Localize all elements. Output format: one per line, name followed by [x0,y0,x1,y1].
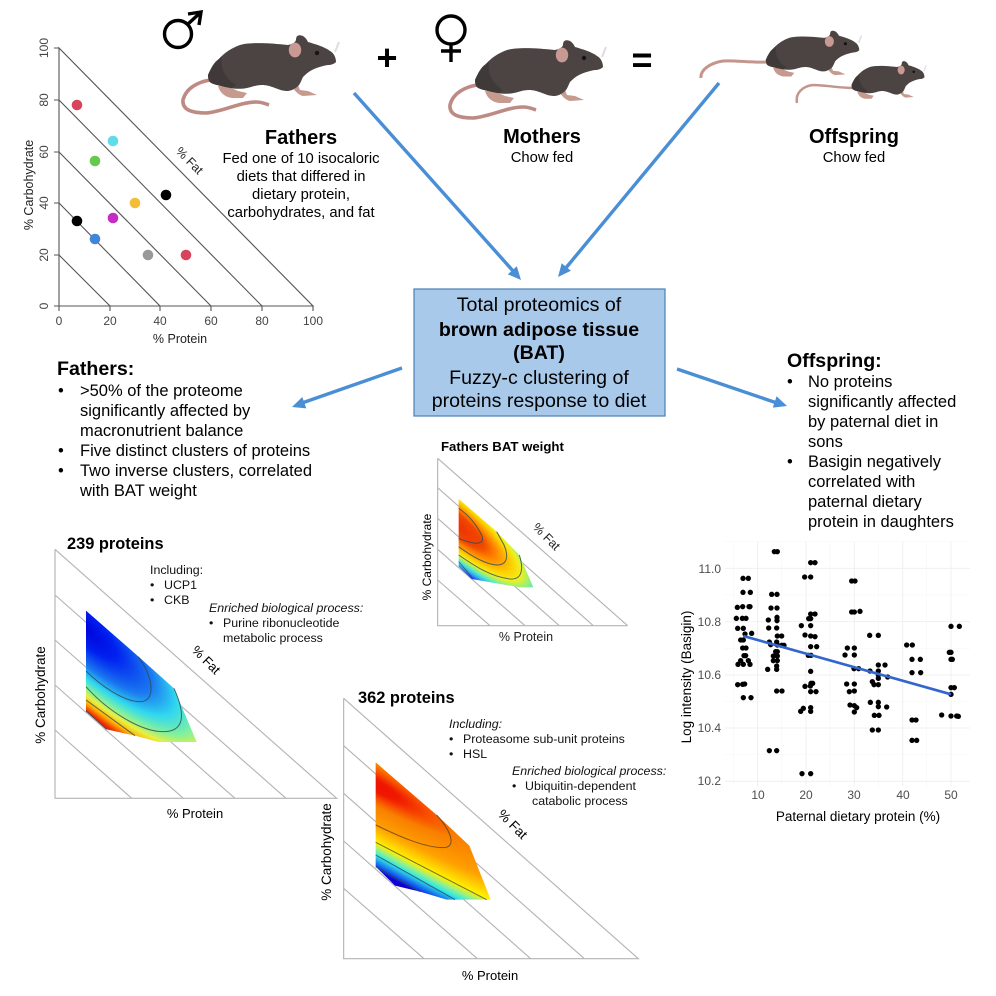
central box: total proteomics: brown adipose tissue [439,319,639,341]
text: fathers: diets that differed in [237,169,365,185]
text: fathers findings: • [58,442,64,460]
arrow: box to offspring [677,369,787,408]
central box: total proteomics: proteins response to diet [432,390,647,412]
text: fathers: dietary protein, [252,187,350,203]
heatmap: fathers BAT weight: % Protein [499,630,553,644]
icon: mother mouse [450,40,606,118]
arrow: box to fathers [292,368,402,408]
heatmap: 239 proteins: % Protein [167,806,223,821]
heatmap: 362 proteins: catabolic process [532,794,628,808]
heatmap: fathers BAT weight [420,439,628,644]
ternary diet plot: 100 [37,38,51,58]
text: offspring findings: sons [808,433,843,451]
text: mothers: Mothers [503,126,581,148]
ternary diet plot: 40 [37,196,51,210]
text: fathers findings: Fathers: [57,358,134,380]
text: offspring findings: protein in daughters [808,513,954,531]
ternary diet plot [22,38,323,346]
heatmap: 239 proteins: Enriched biological process: [209,601,363,615]
scatter plot: basigin vs paternal protein: Log intensity (Basigin) [679,611,694,743]
heatmap: 362 proteins: Proteasome sub-unit proteins [463,732,625,746]
text: offspring findings: Offspring: [787,350,882,372]
text: fathers: carbohydrates, and fat [227,205,375,221]
arrow: fathers to box [354,93,521,280]
heatmap: 239 proteins: metabolic process [223,631,323,645]
arrow: offspring to box [558,83,719,277]
ternary diet plot: 60 [204,314,218,328]
scatter plot: basigin vs paternal protein: 10.4 [698,721,721,735]
text: fathers findings: Two inverse clusters, correlated [80,462,312,480]
heatmap: 239 proteins [33,535,363,821]
heatmap: 362 proteins: • [449,747,453,761]
text: offspring findings: significantly affected [808,393,956,411]
ternary diet plot: 40 [153,314,167,328]
scatter plot: basigin vs paternal protein: 11.0 [699,562,721,576]
text: fathers: Fed one of 10 isocaloric [222,151,380,167]
central box: total proteomics: Fuzzy-c clustering of [449,367,629,389]
text: fathers findings: >50% of the proteome [80,382,243,400]
text: mothers: Chow fed [511,150,573,166]
text: fathers findings: significantly affected by [80,402,251,420]
scatter plot: basigin vs paternal protein: 30 [847,788,861,802]
scatter plot: basigin vs paternal protein: 40 [896,788,910,802]
text: fathers findings: Five distinct clusters of proteins [80,442,310,460]
scatter plot: basigin vs paternal protein: 50 [944,788,958,802]
heatmap: 362 proteins: 362 proteins [358,689,455,707]
scatter plot: basigin vs paternal protein: Paternal dietary protein (%) [776,809,940,824]
heatmap: 239 proteins: • [150,593,154,607]
text: fathers findings [57,358,312,500]
text: offspring findings: Basigin negatively [808,453,942,471]
ternary diet plot: % Carbohydrate [22,140,36,230]
ternary diet plot: % Fat [173,144,206,178]
equals sign: = [631,39,653,80]
ternary diet plot: 60 [37,145,51,159]
heatmap: 362 proteins: Enriched biological process: [512,764,666,778]
ternary diet plot: 20 [103,314,117,328]
text: offspring: Offspring [809,126,899,148]
text: fathers findings: with BAT weight [79,482,197,500]
heatmap: 239 proteins: % Carbohydrate [33,646,48,744]
scatter plot: basigin vs paternal protein: 10.6 [698,668,721,682]
text: fathers: Fathers [265,127,337,149]
heatmap: 239 proteins: 239 proteins [67,535,164,553]
scatter plot: basigin vs paternal protein: 20 [799,788,813,802]
heatmap: 362 proteins: HSL [463,747,487,761]
central box: total proteomics: Total proteomics of [457,294,622,316]
ternary diet plot: 100 [303,314,323,328]
text: mothers [503,126,581,166]
text: offspring: Chow fed [823,150,885,166]
heatmap: 362 proteins: Ubiquitin-dependent [525,779,636,793]
ternary diet plot: 80 [255,314,269,328]
text: fathers findings: macronutrient balance [80,422,243,440]
text: offspring findings: correlated with [808,473,915,491]
heatmap: fathers BAT weight: Fathers BAT weight [441,439,564,454]
heatmap: 362 proteins: % Fat [495,807,531,842]
scatter plot: basigin vs paternal protein: 10.2 [698,774,721,788]
heatmap: 239 proteins: UCP1 [164,578,197,592]
text: offspring findings [787,350,956,531]
heatmap: fathers BAT weight: % Carbohydrate [420,513,434,600]
heatmap: 362 proteins: • [449,732,453,746]
icon: offspring mice [701,31,926,103]
heatmap: 239 proteins: % Fat [189,643,224,677]
heatmap: 362 proteins: % Protein [462,968,518,983]
text: offspring findings: • [787,453,793,471]
heatmap: 239 proteins: Including: [150,563,203,577]
text: offspring [809,126,899,166]
text: fathers findings: • [58,462,64,480]
heatmap: 362 proteins: % Carbohydrate [319,803,334,901]
ternary diet plot: 0 [37,302,51,309]
heatmap: 239 proteins: CKB [164,593,189,607]
text: offspring findings: by paternal diet in [808,413,938,431]
text: offspring findings: No proteins [808,373,892,391]
ternary diet plot: 20 [37,248,51,262]
heatmap: 362 proteins: Including: [449,717,502,731]
text: fathers [222,127,380,221]
heatmap: 239 proteins: • [209,616,213,630]
scatter plot: basigin vs paternal protein: 10.8 [698,615,721,629]
text: offspring findings: paternal dietary [808,493,922,511]
scatter plot: basigin vs paternal protein: 10 [751,788,765,802]
heatmap: 239 proteins: Purine ribonucleotide [223,616,340,630]
icon: male symbol [164,12,201,48]
heatmap: 239 proteins: • [150,578,154,592]
ternary diet plot: % Protein [153,332,207,346]
heatmap: 362 proteins: • [512,779,516,793]
icon: father mouse [183,35,339,113]
plus sign: + [376,37,398,78]
central box: total proteomics: (BAT) [513,342,565,364]
heatmap: 362 proteins [319,689,666,983]
ternary diet plot: 0 [56,314,63,328]
central box: total proteomics [414,289,665,416]
icon: female symbol [437,16,465,62]
ternary diet plot: 80 [37,93,51,107]
text: fathers findings: • [58,382,64,400]
text: offspring findings: • [787,373,793,391]
scatter plot: basigin vs paternal protein [679,542,970,824]
heatmap: fathers BAT weight: % Fat [530,520,563,554]
